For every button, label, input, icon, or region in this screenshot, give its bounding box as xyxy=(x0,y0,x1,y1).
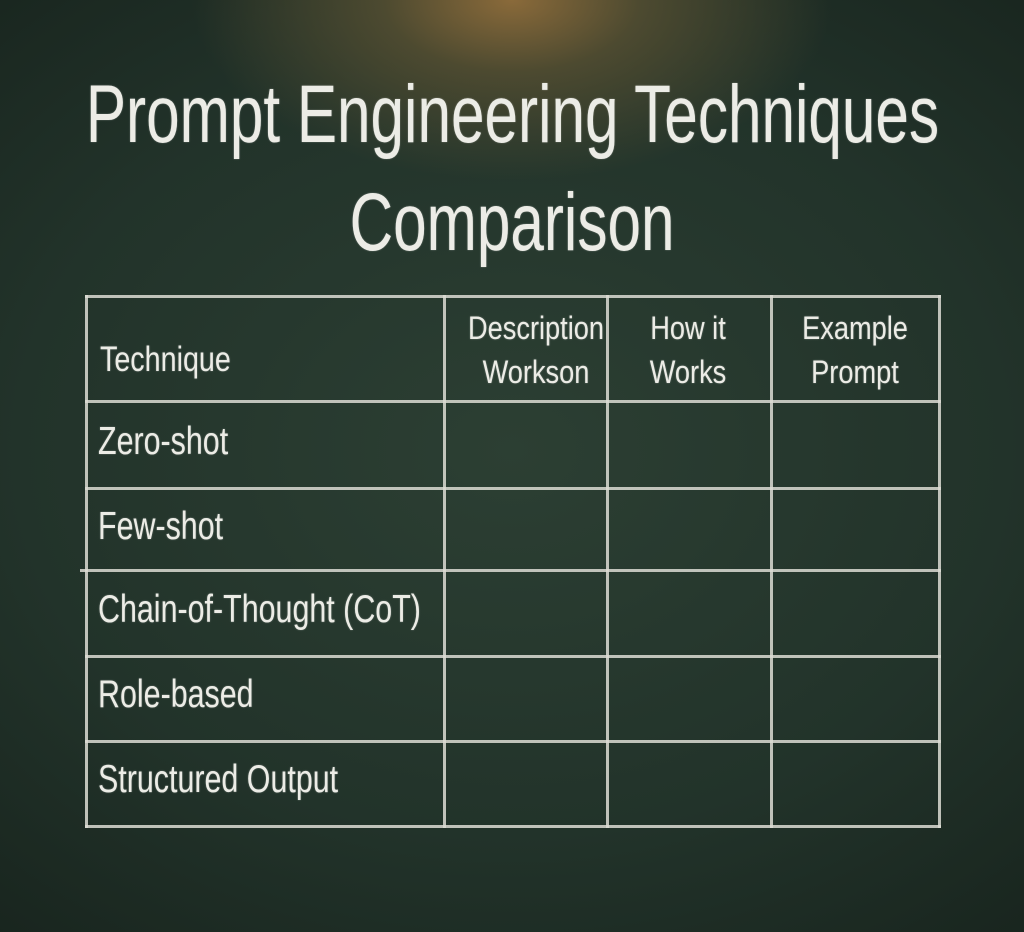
row label: few-shot: Few-shot xyxy=(98,505,223,548)
title: Prompt Engineering Techniques xyxy=(85,69,939,160)
row label: CoT: Chain-of-Thought (CoT) xyxy=(98,588,421,631)
row label: zero-shot: Zero-shot xyxy=(98,420,228,463)
table xyxy=(80,295,941,828)
row label: structured output: Structured Output xyxy=(98,758,338,801)
header: example prompt: Example xyxy=(802,310,908,346)
title xyxy=(85,69,939,268)
header: how it works xyxy=(649,310,726,390)
row label: role-based: Role-based xyxy=(98,673,254,716)
header: how it works: How it xyxy=(650,310,726,346)
header: how it works: Works xyxy=(650,354,726,390)
header: example prompt: Prompt xyxy=(811,354,899,390)
header: description: Description xyxy=(468,310,604,346)
header: description: Workson xyxy=(483,354,589,390)
header: example prompt xyxy=(802,310,908,390)
title: Comparison xyxy=(350,177,674,268)
header: description xyxy=(468,310,604,390)
header: technique: Technique xyxy=(100,340,231,379)
